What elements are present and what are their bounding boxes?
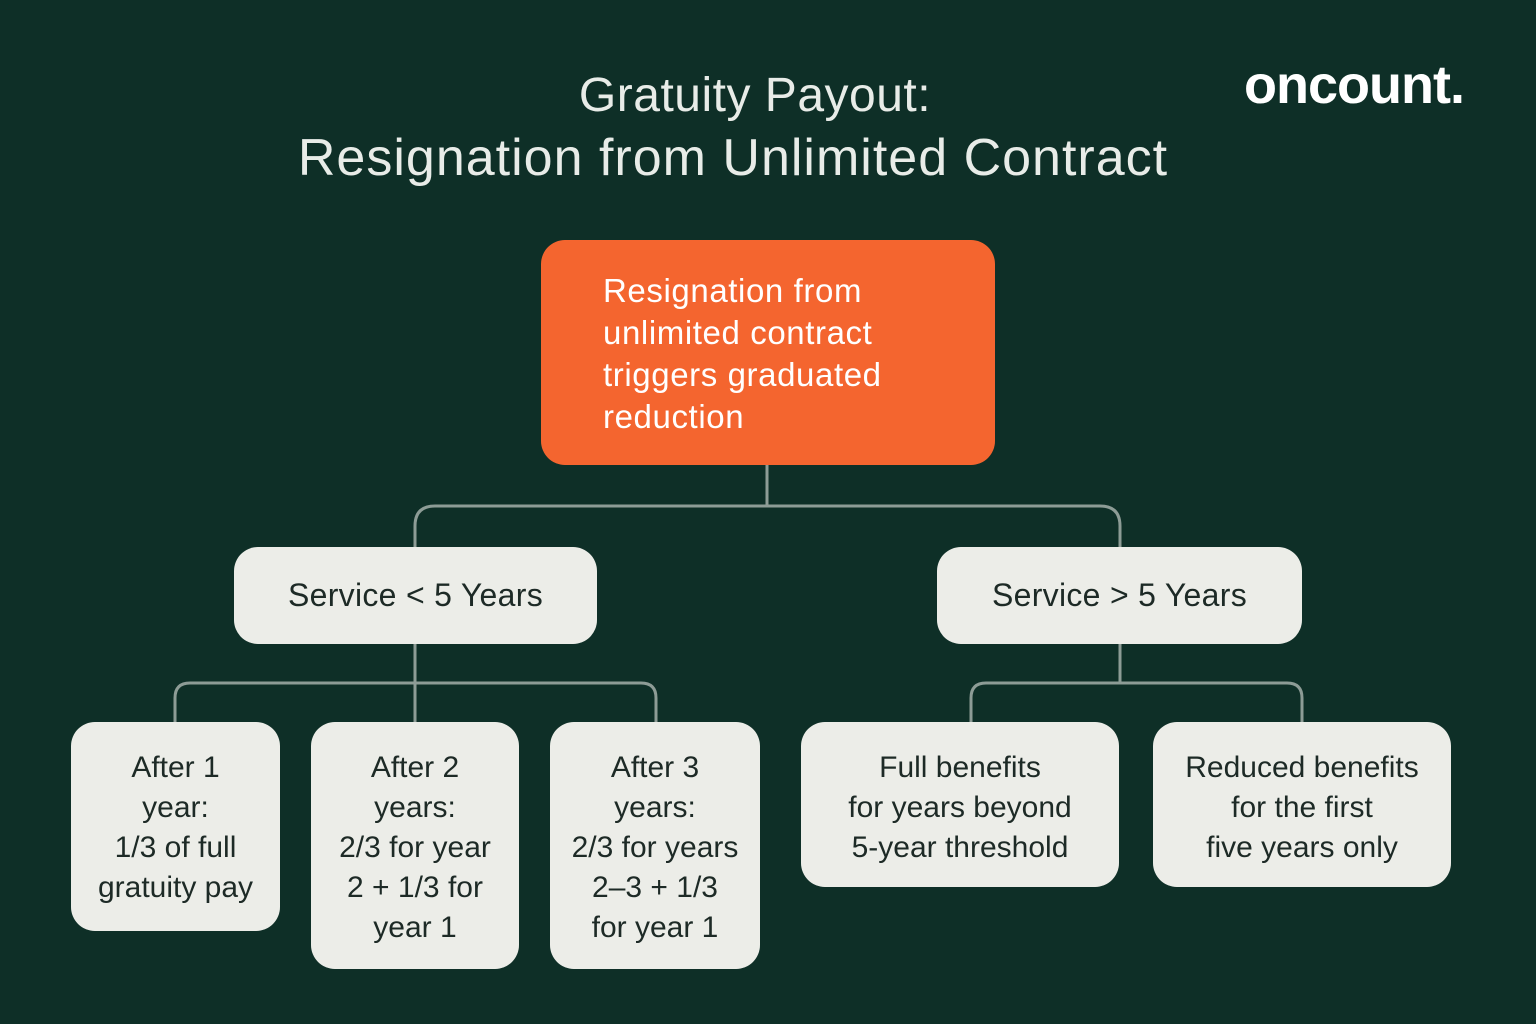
logo: oncount.: [1244, 55, 1464, 115]
box: after 1 year: gratuity pay: [98, 871, 253, 904]
box: service > 5 years: Service > 5 Years: [992, 577, 1247, 613]
box: reduced benefits: Reduced benefits: [1185, 751, 1419, 784]
box: full benefits: for years beyond: [848, 791, 1072, 824]
box: after 1 year: [71, 722, 280, 931]
box: after 3 years: years:: [614, 791, 696, 824]
box: after 3 years: [550, 722, 760, 969]
box: full benefits: Full benefits: [879, 751, 1041, 784]
box: after 3 years: for year 1: [592, 911, 718, 944]
box: service > 5 years: [937, 547, 1302, 644]
box: after 3 years: 2/3 for years: [572, 831, 738, 864]
orange root box: unlimited contract: [603, 314, 872, 351]
box: after 2 years: 2/3 for year: [339, 831, 491, 864]
box: service < 5 years: [234, 547, 597, 644]
title: [298, 69, 1168, 187]
box: after 2 years: 2 + 1/3 for: [347, 871, 483, 904]
orange root box: triggers graduated: [603, 356, 882, 393]
box: after 3 years: After 3: [611, 751, 699, 784]
box: after 2 years: After 2: [371, 751, 459, 784]
box: after 1 year: 1/3 of full: [115, 831, 236, 864]
box: after 1 year: After 1: [131, 751, 220, 784]
title: Gratuity Payout:: [579, 69, 931, 122]
box: reduced benefits: five years only: [1206, 831, 1398, 864]
orange root box: [541, 240, 995, 465]
orange root box: reduction: [603, 398, 744, 435]
box: after 1 year: year:: [142, 791, 209, 824]
box: after 2 years: year 1: [373, 911, 457, 944]
box: after 2 years: [311, 722, 519, 969]
box: after 2 years: years:: [374, 791, 456, 824]
box: reduced benefits: [1153, 722, 1451, 887]
box: reduced benefits: for the first: [1231, 791, 1373, 824]
box: after 3 years: 2–3 + 1/3: [592, 871, 718, 904]
title: Resignation from Unlimited Contract: [298, 129, 1168, 187]
orange root box: Resignation from: [603, 272, 862, 309]
box: full benefits: 5-year threshold: [852, 831, 1068, 864]
box: service < 5 years: Service < 5 Years: [288, 577, 543, 613]
box: full benefits: [801, 722, 1119, 887]
